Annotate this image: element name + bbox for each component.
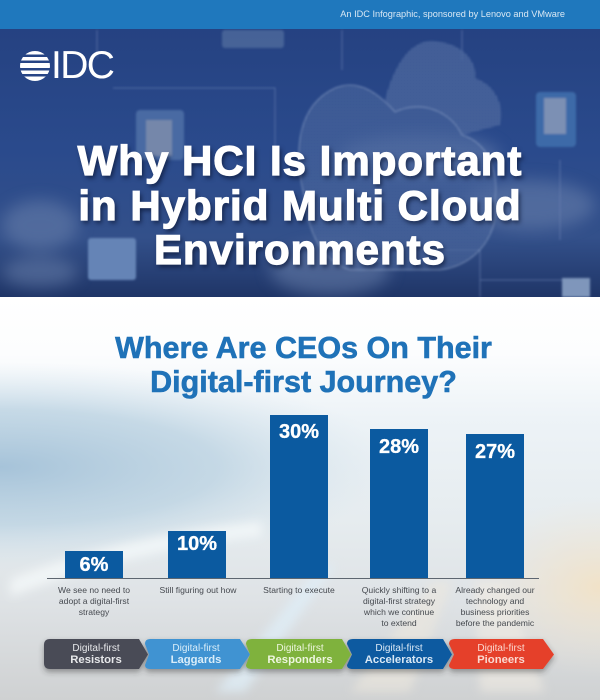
caption: pioneers: business priorities bbox=[461, 607, 529, 617]
main title: Environments bbox=[154, 226, 446, 273]
caption: accelerators: digital-first strategy bbox=[363, 596, 435, 606]
caption: pioneers bbox=[455, 585, 535, 628]
caption: pioneers: Already changed our bbox=[455, 585, 535, 595]
bar: 28% bbox=[370, 429, 428, 578]
chart heading bbox=[114, 331, 492, 399]
chart heading: Digital-first Journey? bbox=[150, 365, 457, 399]
arrow: responders bbox=[246, 639, 351, 669]
main title bbox=[76, 137, 525, 273]
label: laggards bbox=[171, 643, 221, 666]
caption: laggards: Still figuring out how bbox=[160, 585, 236, 595]
caption: pioneers: before the pandemic bbox=[456, 618, 534, 628]
bar: 27%: 27% bbox=[475, 441, 515, 463]
label: resistors bbox=[70, 643, 122, 666]
bar: 6% bbox=[65, 551, 123, 578]
sponsor line: An IDC Infographic, sponsored by Lenovo and VMware bbox=[340, 9, 565, 19]
caption: responders: Starting to execute bbox=[263, 585, 335, 595]
stage arrows bbox=[40, 638, 556, 676]
caption: resistors: strategy bbox=[79, 607, 109, 617]
label: pioneers bbox=[477, 643, 525, 666]
label: accelerators: Digital-first bbox=[375, 643, 423, 654]
arrow: resistors bbox=[44, 639, 148, 669]
background: blurred motion road bbox=[0, 366, 600, 700]
caption: accelerators: Quickly shifting to a bbox=[362, 585, 436, 595]
caption: resistors: We see no need to bbox=[58, 585, 130, 595]
caption: accelerators: which we continue bbox=[364, 607, 434, 617]
bar: 6%: 6% bbox=[80, 554, 108, 576]
bar: 28%: 28% bbox=[379, 436, 419, 458]
label: accelerators: Accelerators bbox=[365, 654, 433, 666]
arrow: laggards bbox=[145, 639, 250, 669]
bar: 30% bbox=[270, 415, 328, 578]
header image panel bbox=[0, 29, 600, 297]
chart heading: Where Are CEOs On Their bbox=[115, 331, 492, 365]
label: pioneers: Digital-first bbox=[477, 643, 525, 654]
bar: 30%: 30% bbox=[279, 421, 319, 443]
stage labels bbox=[70, 643, 525, 666]
label: responders: Responders bbox=[267, 654, 333, 666]
logo wordmark: IDC bbox=[51, 44, 113, 87]
label: resistors: Digital-first bbox=[72, 643, 120, 654]
label: resistors: Resistors bbox=[70, 654, 122, 666]
label: accelerators bbox=[365, 643, 433, 666]
caption: accelerators: to extend bbox=[381, 618, 417, 628]
bar: 27% bbox=[466, 434, 524, 578]
label: pioneers: Pioneers bbox=[477, 654, 525, 666]
main title: Why HCI Is Important bbox=[78, 137, 522, 184]
caption: accelerators bbox=[362, 585, 436, 628]
caption: resistors: adopt a digital-first bbox=[59, 596, 129, 606]
logo globe bbox=[20, 51, 50, 81]
caption: pioneers: technology and bbox=[466, 596, 524, 606]
label: laggards: Digital-first bbox=[172, 643, 220, 654]
arrow: accelerators bbox=[347, 639, 452, 669]
label: responders bbox=[267, 643, 333, 666]
main title: in Hybrid Multi Cloud bbox=[78, 182, 522, 228]
IDC logo bbox=[20, 44, 114, 87]
bar: 10% bbox=[168, 531, 226, 578]
label: laggards: Laggards bbox=[171, 654, 221, 666]
label: responders: Digital-first bbox=[276, 643, 324, 654]
arrow: pioneers bbox=[449, 639, 554, 669]
bar: 10%: 10% bbox=[177, 533, 217, 555]
caption: resistors bbox=[58, 585, 130, 617]
top banner bbox=[0, 0, 600, 29]
